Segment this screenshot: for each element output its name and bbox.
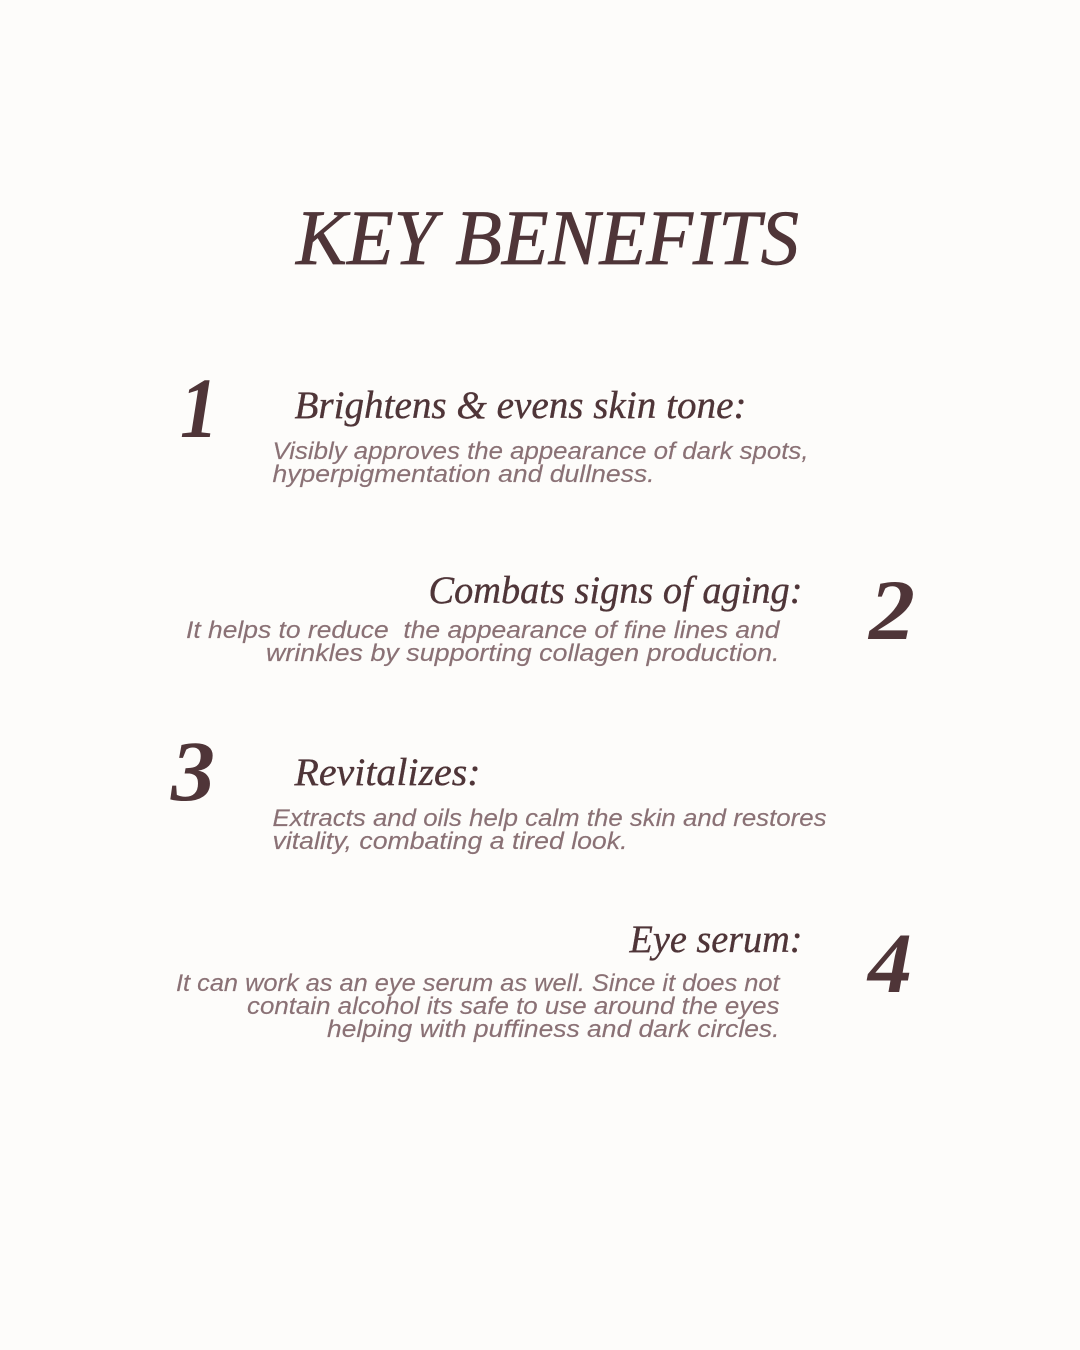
description 1 bbox=[272, 438, 808, 488]
description 2 bbox=[186, 617, 781, 667]
benefit 2: combats aging bbox=[186, 562, 915, 667]
description 4 bbox=[176, 970, 781, 1043]
benefit 4: eye serum bbox=[176, 915, 912, 1043]
heading 4: Eye serum: bbox=[629, 918, 802, 961]
title: KEY BENEFITS bbox=[295, 194, 799, 281]
heading 1: Brightens & evens skin tone: bbox=[294, 384, 746, 427]
description 1: hyperpigmentation and dullness. bbox=[272, 461, 654, 488]
description 4: It can work as an eye serum as well. Since it does not bbox=[176, 970, 781, 997]
number 3: 3 bbox=[170, 723, 215, 819]
heading 3: Revitalizes: bbox=[293, 751, 480, 794]
description 4: contain alcohol its safe to use around the eyes bbox=[247, 993, 780, 1020]
description 3 bbox=[272, 805, 826, 855]
number 4: 4 bbox=[866, 915, 912, 1011]
description 1: Visibly approves the appearance of dark spots, bbox=[272, 438, 808, 465]
description 3: Extracts and oils help calm the skin and restores bbox=[272, 805, 826, 832]
benefit 3: revitalizes bbox=[170, 723, 826, 855]
description 2: It helps to reduce the appearance of fine lines and bbox=[186, 617, 781, 644]
description 4: helping with puffiness and dark circles. bbox=[327, 1016, 780, 1043]
description 3: vitality, combating a tired look. bbox=[272, 828, 628, 855]
heading 2: Combats signs of aging: bbox=[428, 569, 802, 612]
benefit 1: brightens bbox=[180, 360, 808, 488]
description 2: wrinkles by supporting collagen production. bbox=[266, 640, 780, 667]
number 2: 2 bbox=[867, 562, 915, 658]
number 1: 1 bbox=[180, 360, 218, 456]
